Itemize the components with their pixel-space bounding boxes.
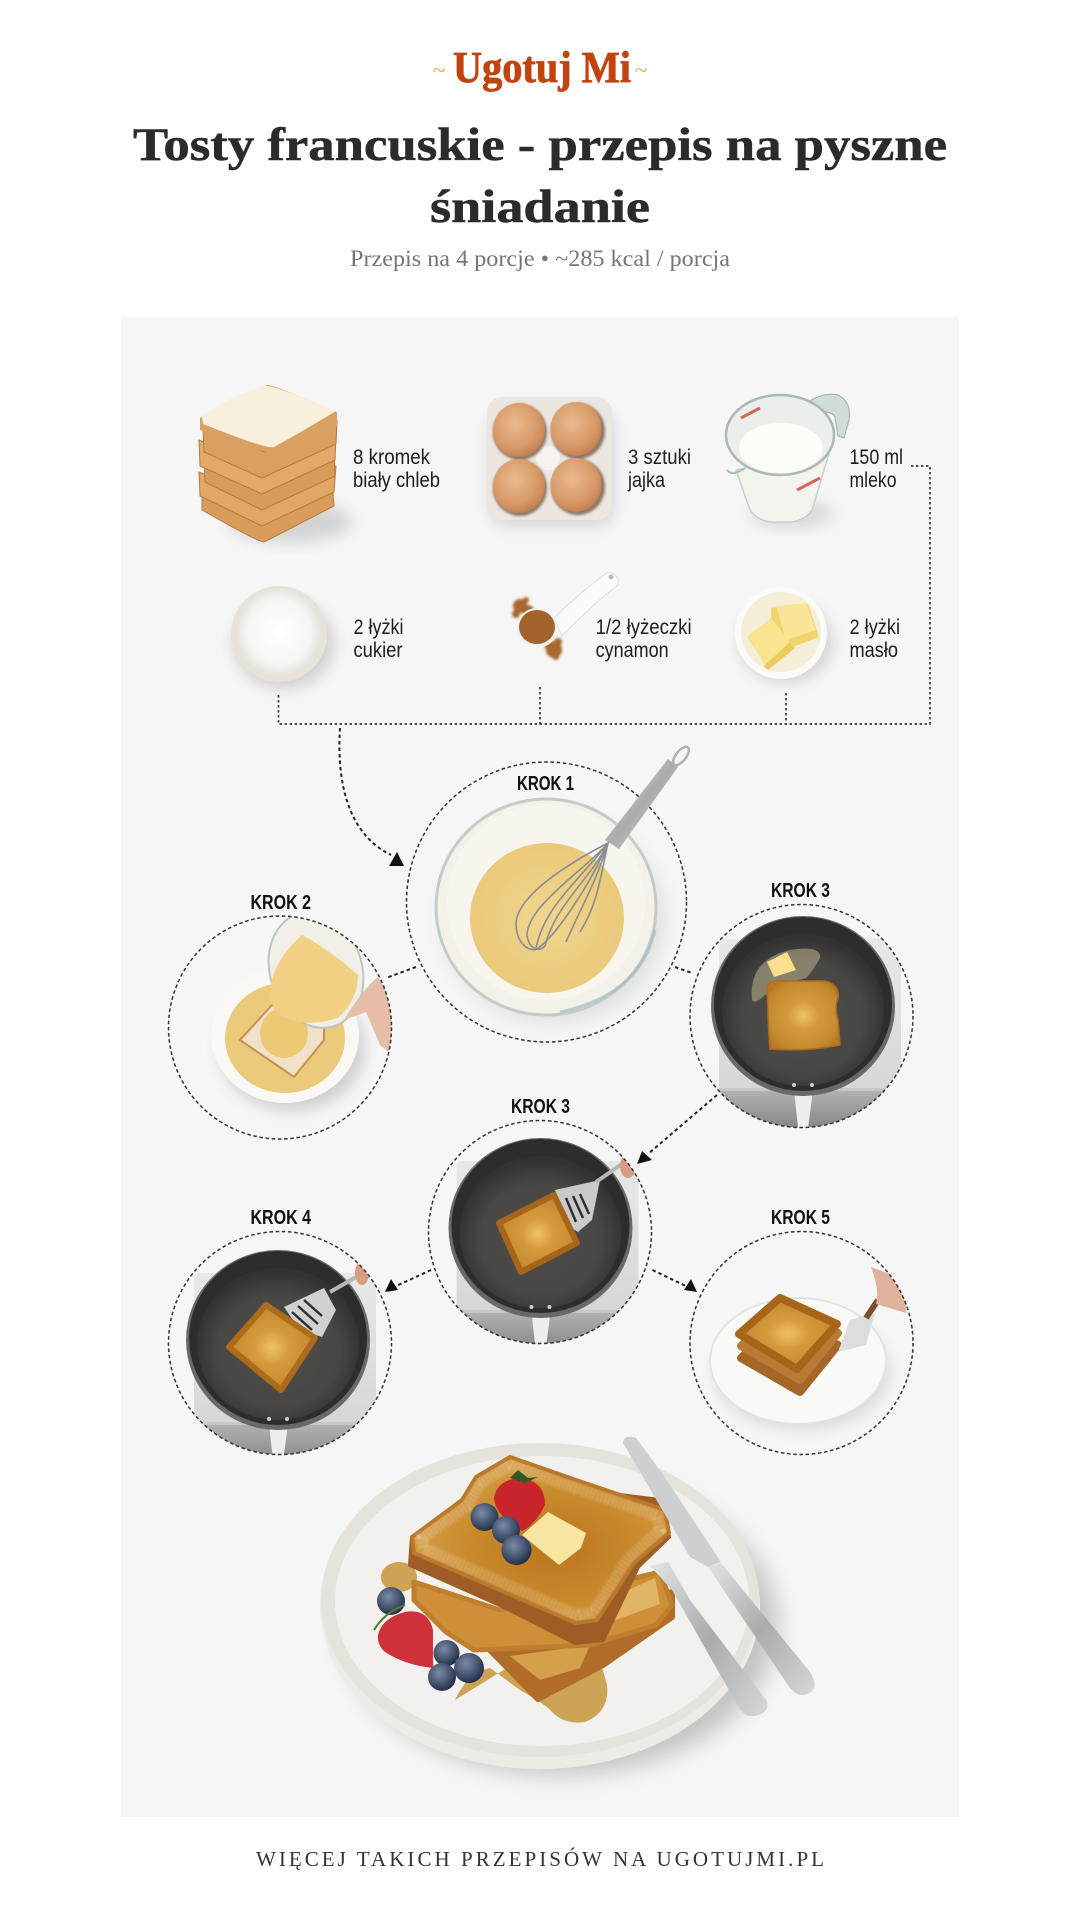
label: eggs: 3 sztuki [628,446,691,469]
label: KROK 2: KROK 2 [250,892,311,914]
label: sugar [354,616,404,662]
label: KROK 1: KROK 1 [517,773,574,795]
arrow: to step 5 [652,1270,697,1292]
logo: Ugotuj Mi: Ugotuj Mi [453,43,631,92]
final dish: plated french toast [320,1437,815,1775]
middle toast [414,1572,672,1650]
label: KROK 4: KROK 4 [250,1207,312,1229]
fruit and butter [374,1470,586,1691]
title: śniadanie [430,181,650,233]
label: KROK 3: KROK 3 [771,880,830,902]
step 2: soaking bread [168,892,392,1139]
label: sugar: cukier [354,639,402,662]
arrow: ingredients to step 1 [339,728,404,866]
title [133,119,947,233]
step 3b: flipping toast [428,1099,652,1344]
syrup pools [381,1562,607,1723]
top toast [410,1457,669,1643]
footer: WIĘCEJ TAKICH PRZEPISÓW NA UGOTUJMI.PL [256,1847,824,1871]
label: bread: biały chleb [353,469,440,492]
ingredient: sugar bowl [231,586,334,688]
label: eggs [627,446,691,492]
step 3: frying with butter [690,880,913,1150]
connector: ingredients bracket [278,466,930,724]
step 4: second side [168,1210,392,1456]
ingredient: cinnamon spoon [512,572,618,660]
knife [623,1437,815,1695]
connector: step 1 to step 2 [386,967,416,978]
label: bread: 8 kromek [353,446,430,469]
label: butter: 2 łyżki [850,616,900,639]
label: KROK 3: KROK 3 [511,1096,570,1118]
label: milk: mleko [850,469,896,492]
ingredient: bread [199,385,352,542]
label: bread [353,446,440,492]
label: butter [850,616,900,662]
label: sugar: 2 łyżki [354,616,404,639]
logo: Ugotuj Mi: ~ [635,58,648,84]
bottom toast [490,1592,672,1699]
label: milk [850,446,903,492]
panel: recipe illustration [121,317,959,1817]
label: cinnamon [596,616,692,662]
ingredient: milk jug [726,394,850,528]
label: milk: 150 ml [850,446,903,469]
label: eggs: jajka [627,469,665,492]
subtitle: Przepis na 4 porcje • ~285 kcal / porcja [350,246,730,271]
label: cinnamon: cynamon [596,639,669,662]
connector: step 1 to step 3 [675,967,692,973]
infographic canvas [121,50,959,1870]
plate [320,1443,760,1769]
fork [650,1562,768,1716]
arrow: to step 4 [385,1270,431,1292]
label: cinnamon: 1/2 łyżeczki [596,616,692,639]
title: Tosty francuskie - przepis na pyszne [133,119,947,171]
label: butter: masło [850,639,898,662]
step 5: stacked toast [690,1207,913,1454]
logo: Ugotuj Mi: ~ [433,58,446,84]
icon: whisk [516,744,692,950]
ingredient: eggs in carton [487,397,614,526]
step 1: whisking [406,744,692,1042]
ingredient: butter bowl [735,587,832,682]
label: KROK 5: KROK 5 [771,1207,830,1229]
arrow: step 3 to second step 3 [637,1095,717,1164]
